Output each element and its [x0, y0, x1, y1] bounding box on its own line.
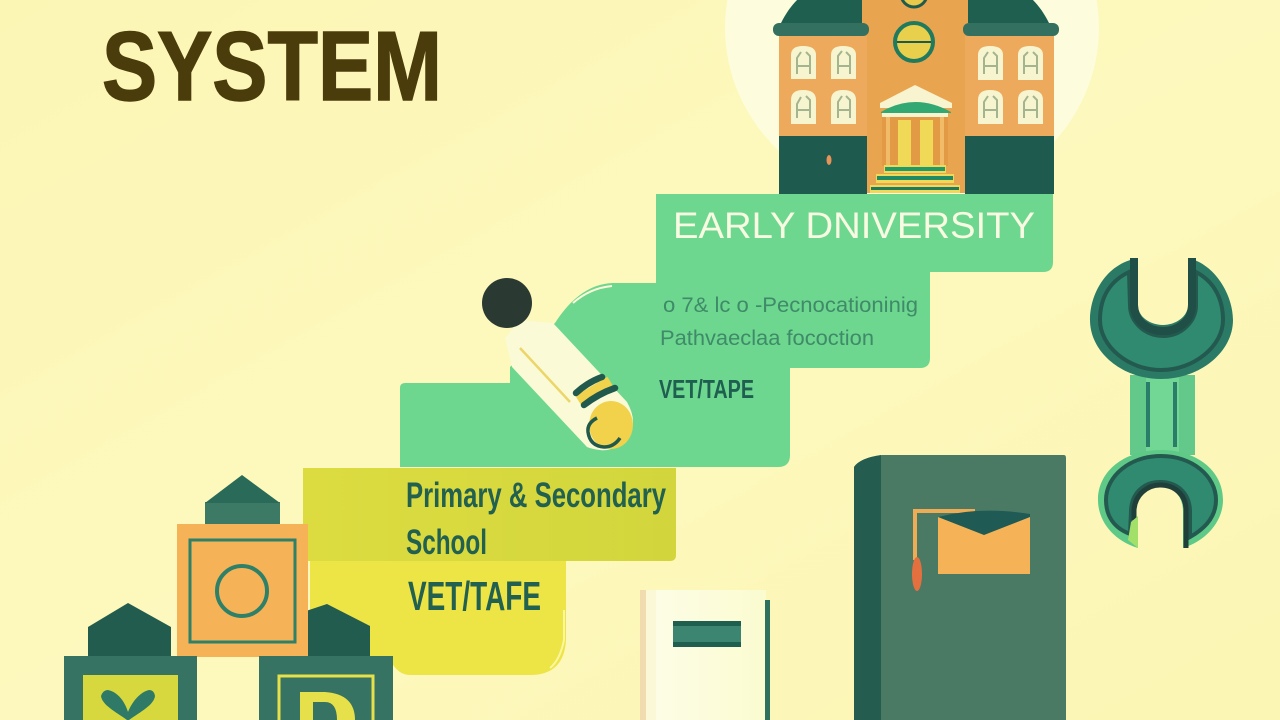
icon: white book — [640, 590, 770, 720]
icon: rolled diploma — [482, 278, 633, 450]
text block: pathway line two: Pathvaeclaa focoction — [660, 327, 874, 350]
icon: university building — [725, 0, 1099, 203]
panel: primary and secondary school — [303, 468, 676, 561]
title: SYSTEM — [102, 11, 442, 121]
label: school: School — [406, 523, 487, 562]
text block: pathway line one: o 7& lc o -Pecnocationinig — [663, 294, 918, 317]
label: vet/tafe: VET/TAFE — [408, 573, 541, 619]
label: vet/tape: VET/TAPE — [659, 374, 754, 404]
heading: early university: EARLY DNIVERSITY — [673, 205, 1035, 246]
icon: green book with graduation cap — [854, 455, 1066, 720]
highlight: yellow panel edge — [550, 610, 564, 668]
panel: stepped green staircase — [400, 194, 1053, 467]
icon: wrench — [1090, 258, 1233, 548]
panel: vet/tafe yellow — [310, 561, 566, 675]
icon: building blocks — [64, 475, 393, 720]
highlight: staircase edge — [573, 286, 612, 303]
label: primary and secondary: Primary & Secondary — [406, 476, 666, 515]
